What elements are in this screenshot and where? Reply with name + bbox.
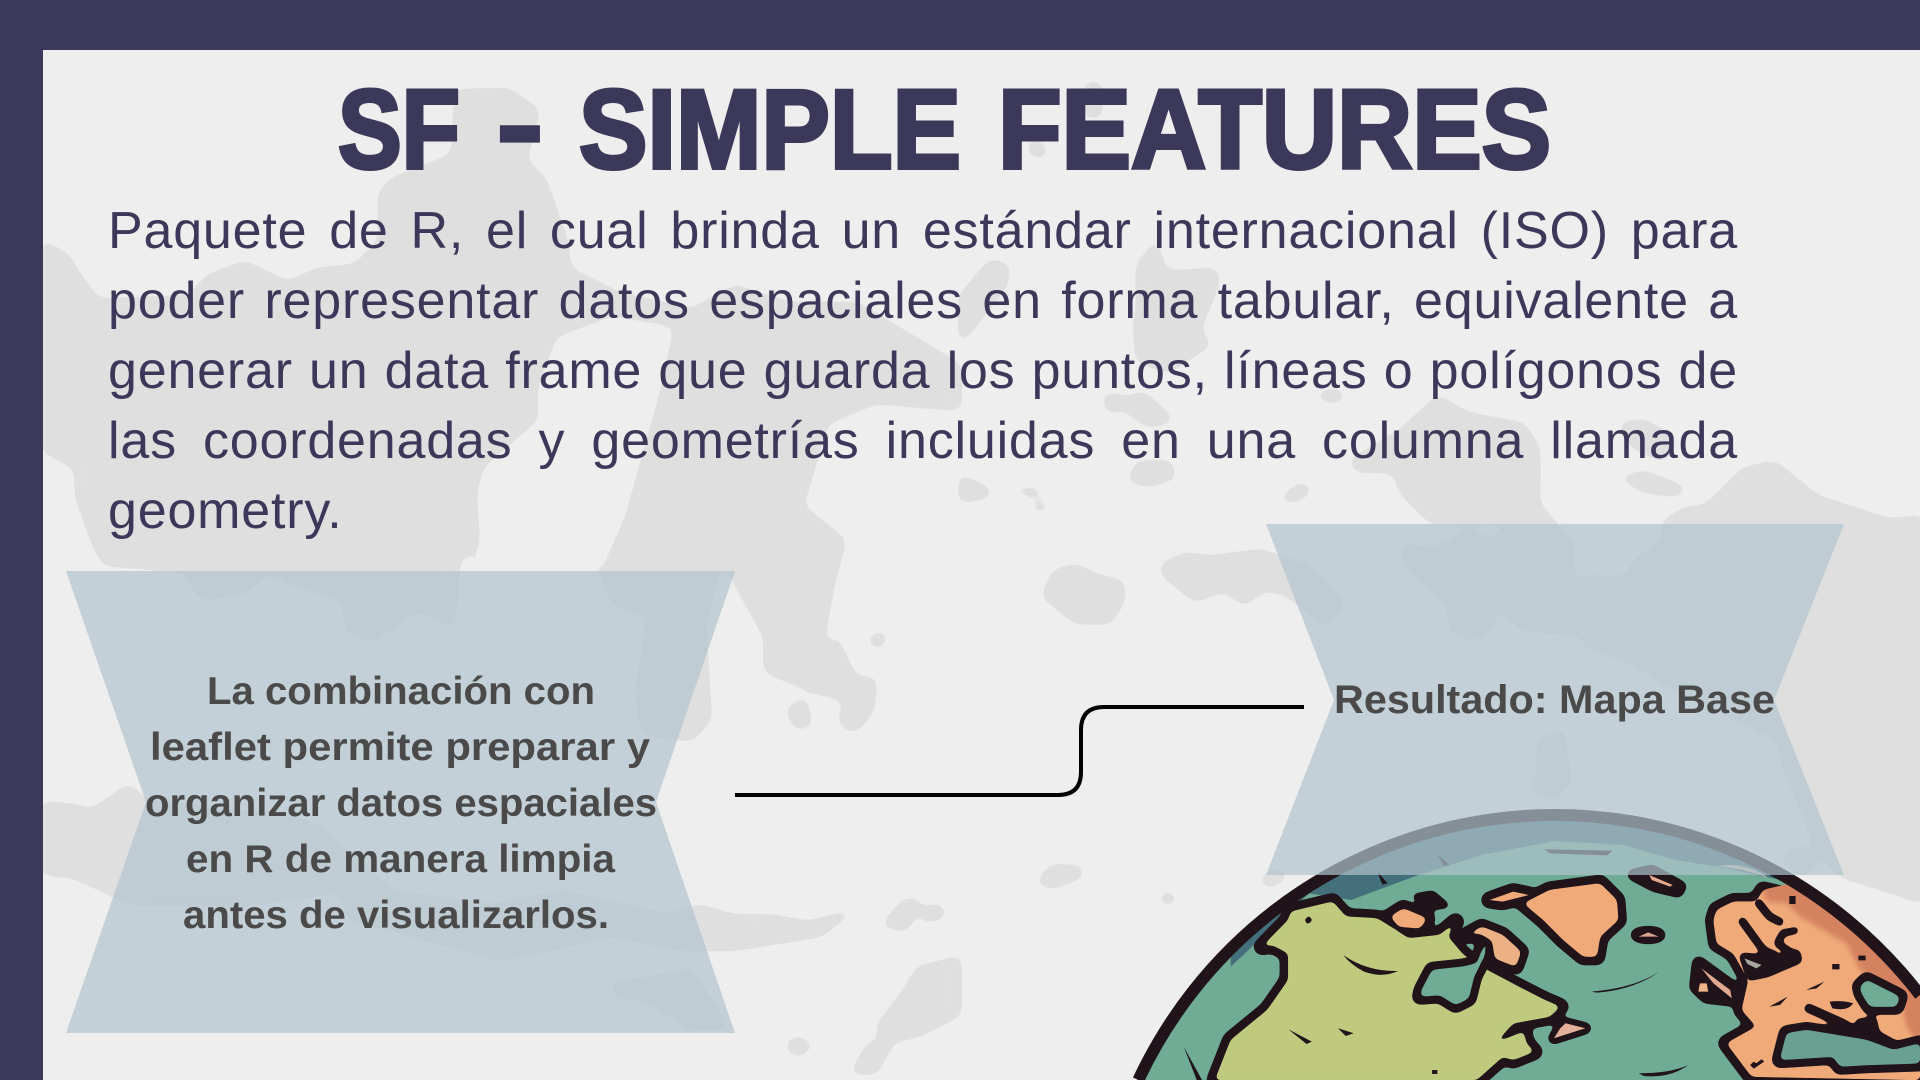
- text: leaflet description: antes de visualizarlos.: [183, 894, 609, 937]
- text block: package description: [108, 202, 1738, 540]
- text block: package description: poder representar datos espaciales en forma tabular, equivalente a: [108, 272, 1738, 330]
- text block: package description: Paquete de R, el cual brinda un estándar internacional (ISO) para: [108, 202, 1738, 260]
- text: leaflet description: organizar datos espaciales: [145, 782, 657, 825]
- panel: right hourglass: [1266, 524, 1844, 875]
- text: leaflet description: leaflet permite preparar y: [150, 726, 650, 769]
- globe illustration: [1137, 821, 1920, 1080]
- text block: package description: geometry.: [108, 482, 343, 540]
- title: FEATURES: [998, 67, 1551, 192]
- title: [338, 62, 1551, 192]
- connector line: [735, 707, 1304, 795]
- text block: package description: generar un data frame que guarda los puntos, líneas o polígonos de: [108, 342, 1738, 400]
- text: leaflet description: en R de manera limpia: [186, 838, 615, 881]
- title: -: [497, 62, 543, 187]
- text: leaflet description: La combinación con: [207, 670, 595, 713]
- text block: package description: las coordenadas y geometrías incluidas en una columna llamada: [108, 412, 1738, 470]
- title: SF: [338, 67, 460, 192]
- globe outer ring: [1138, 815, 1920, 1080]
- panel: left hourglass: [66, 571, 735, 1033]
- text: leaflet description: [145, 670, 657, 937]
- title: SIMPLE: [579, 67, 961, 192]
- text: result label: Resultado: Mapa Base: [1334, 678, 1775, 722]
